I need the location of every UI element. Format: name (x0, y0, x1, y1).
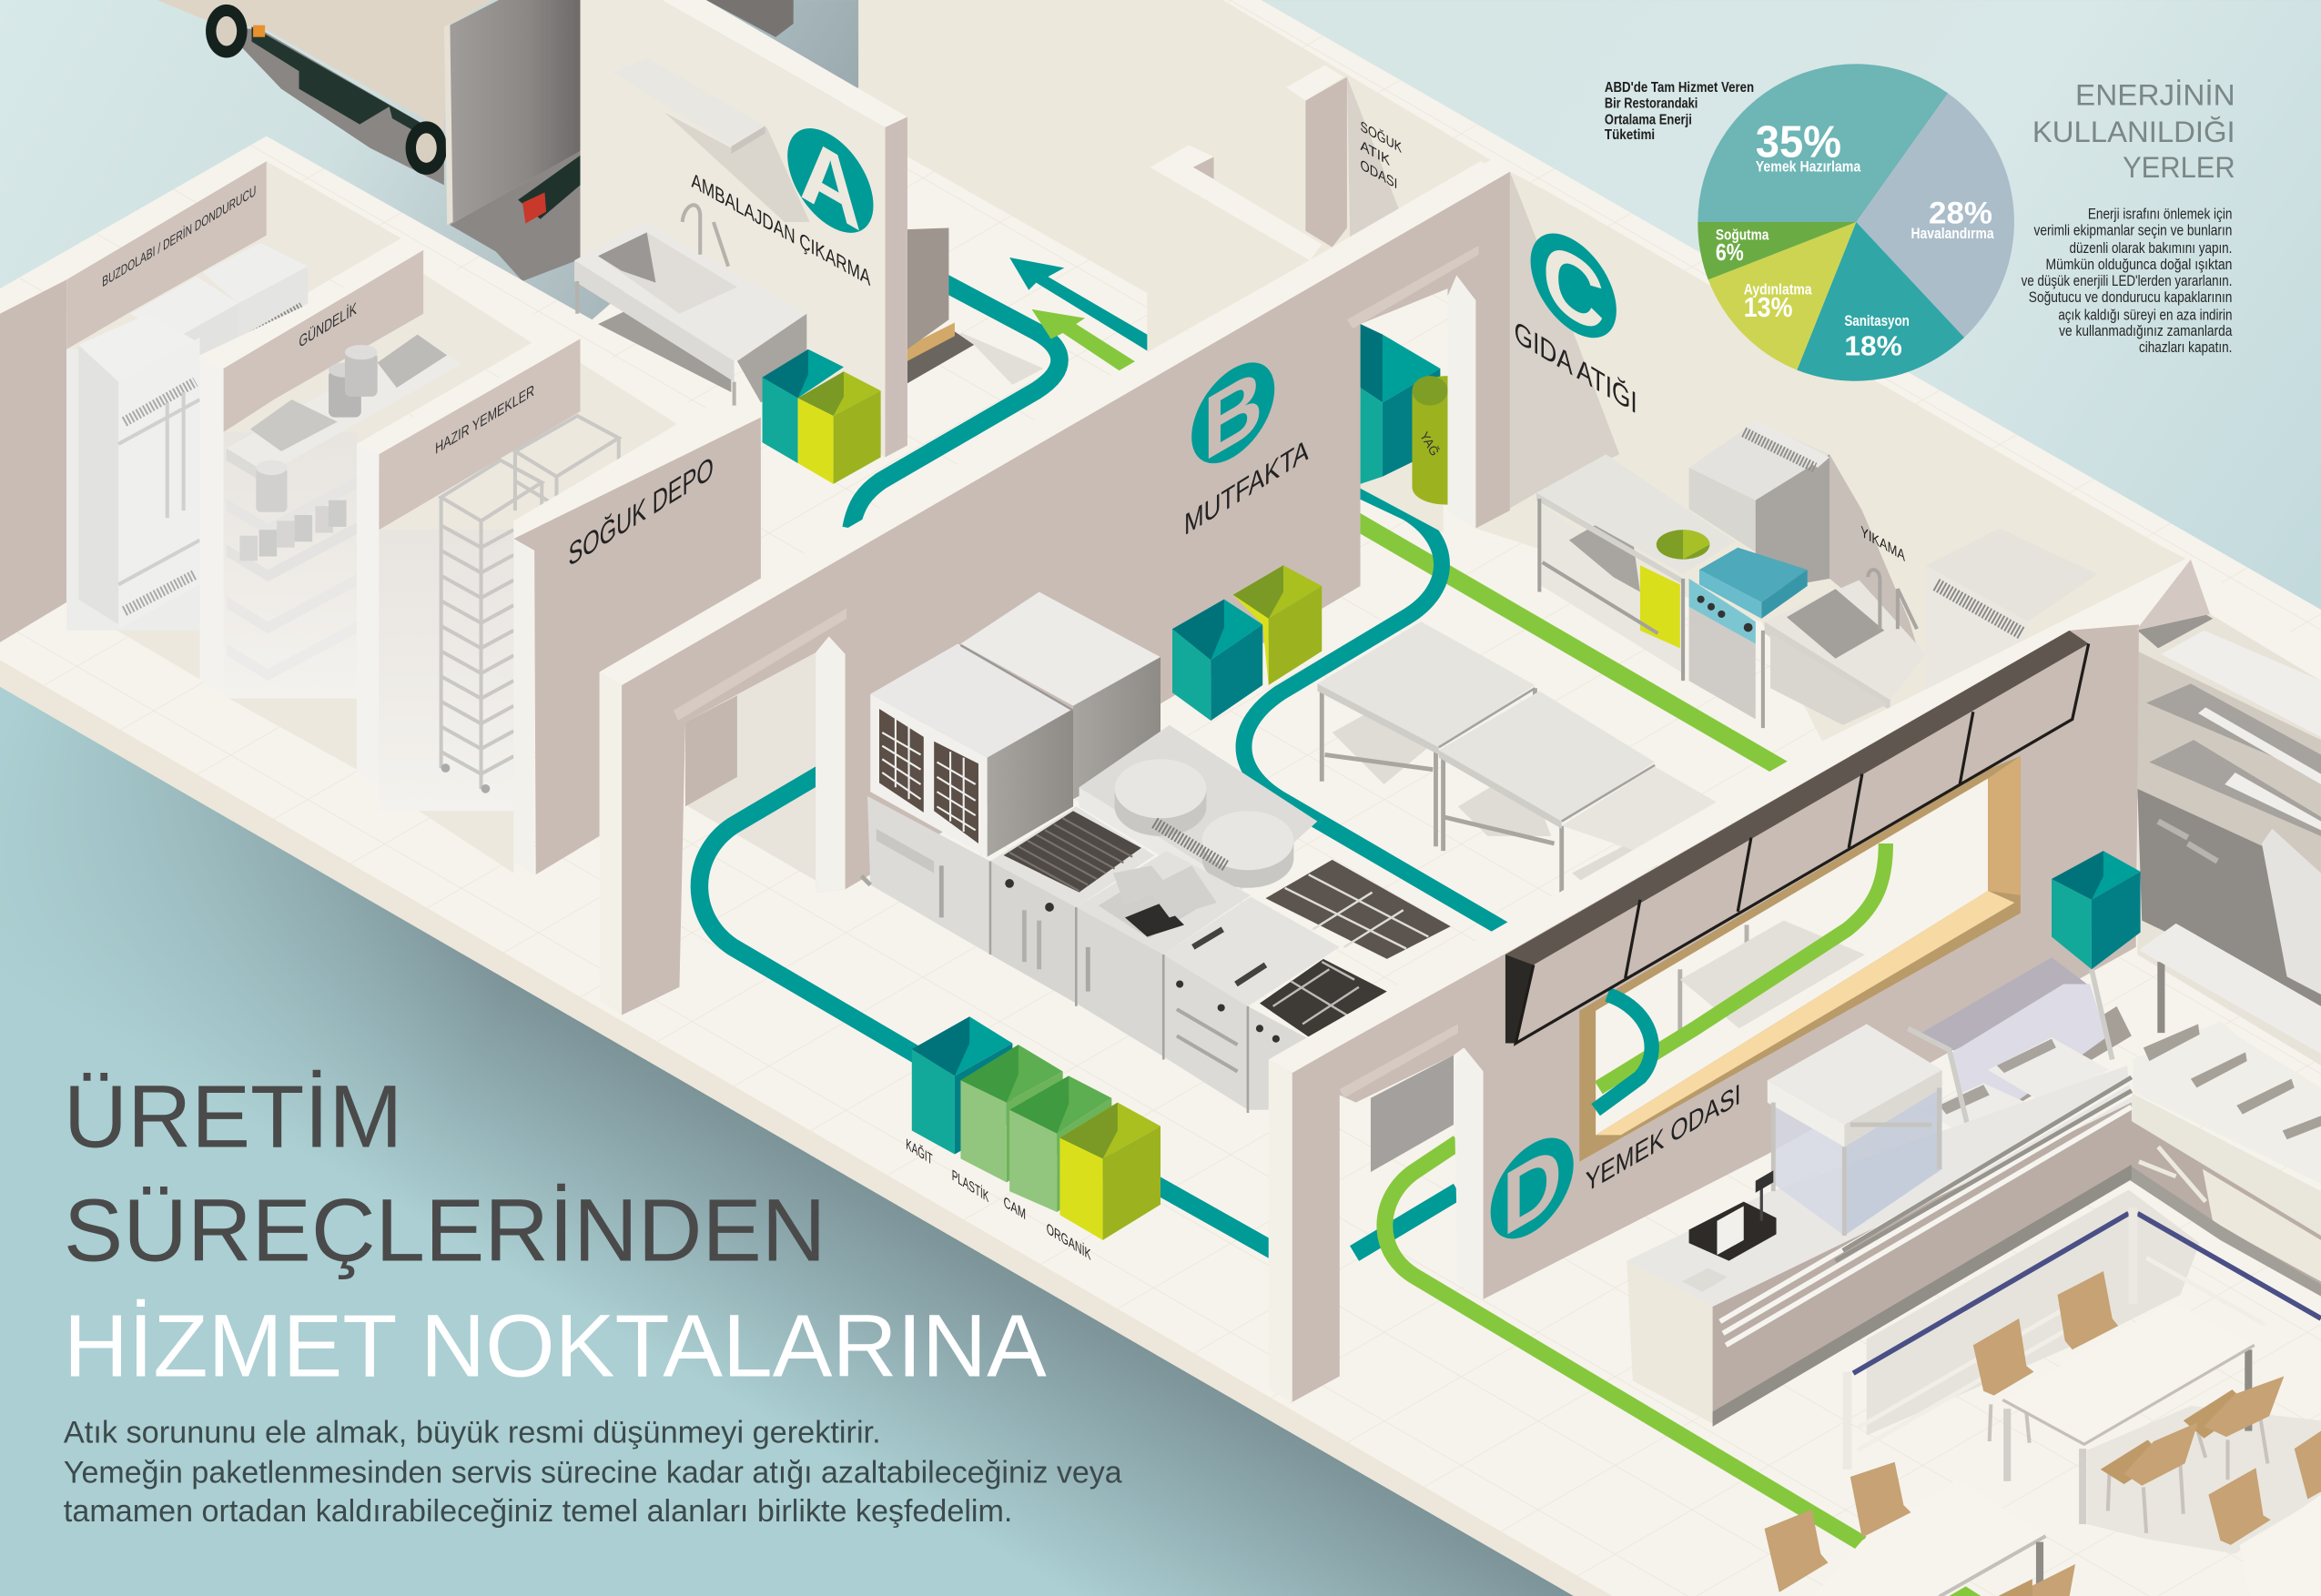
pie labels: Yemek Hazırlama (1756, 159, 1861, 176)
intro text: tamamen ortadan kaldırabileceğiniz temel alanları birlikte keşfedelim. (64, 1494, 1012, 1529)
fridge (78, 314, 200, 629)
intro text (64, 1416, 1122, 1529)
energy heading: YERLER (2123, 151, 2235, 184)
floor shadow right (2087, 1406, 2321, 1554)
trolleys (441, 416, 619, 793)
panel: wall C (1475, 172, 2188, 742)
label: cold waste room: ATIK (1361, 136, 1390, 169)
bin labels: PLASTİK (952, 1167, 988, 1206)
energy tips text: Enerji israfını önlemek için (2088, 207, 2232, 223)
table 3 (2240, 1498, 2321, 1596)
pie labels: Sanitasyon (1844, 313, 1910, 329)
label: washing: YIKAMA (1860, 522, 1905, 565)
panel: cold storage (0, 161, 761, 874)
panel: wall B (600, 161, 1510, 1015)
arrow: green (1032, 309, 1137, 371)
pie labels: Havalandırma (1911, 226, 1994, 242)
label: food waste: GIDA ATIĞI (1515, 315, 1637, 420)
door C and bins (1361, 324, 1447, 532)
energy tips text: ve kullanmadığınız zamanlarda (2059, 323, 2233, 339)
intro text: Yemeğin paketlenmesinden servis sürecine kadar atığı azaltabileceğiniz veya (64, 1456, 1122, 1490)
cooking line (861, 592, 1451, 1113)
bins: recycling (912, 1016, 1160, 1240)
equipment: room C (1536, 420, 2097, 728)
serving window (1579, 756, 2021, 1162)
main title: ÜRETİM (64, 1066, 402, 1166)
hood (1505, 631, 2089, 1044)
energy tips text: ve düşük enerjili LED'lerden yararlanın. (2022, 273, 2232, 289)
arrow: teal (1009, 258, 1147, 350)
energy tips text: cihazları kapatın. (2139, 339, 2232, 356)
storage labels: GÜNDELİK (299, 298, 357, 352)
energy tips text: açık kaldığı süreyi en aza indirin (2058, 307, 2232, 323)
display case (1768, 1024, 1942, 1236)
shelves (227, 335, 461, 681)
storage labels: SOĞUK DEPO (568, 449, 714, 573)
energy tips text (2022, 207, 2233, 356)
oven rack windows (879, 709, 978, 843)
pie labels: 28% (1929, 197, 1992, 231)
prep tables (1317, 621, 1732, 905)
pie title: ABD'de Tam Hizmet Veren (1605, 80, 1754, 96)
dining tables and chairs (1765, 1271, 2321, 1596)
label: cold waste room (1361, 117, 1402, 193)
rope barrier (1848, 1207, 2321, 1470)
pie labels (1716, 117, 1994, 361)
bins at A (763, 349, 881, 484)
chair right 3 (2208, 1468, 2271, 1545)
badge A (787, 106, 874, 258)
badge C (1531, 212, 1617, 364)
chair front 2 (1765, 1510, 1828, 1592)
badge A: A (799, 114, 861, 252)
main title: SÜREÇLERİNDEN (64, 1181, 826, 1280)
serving counter (1627, 1066, 2132, 1427)
bin right (2052, 851, 2141, 969)
chair front 4 (1997, 1579, 2032, 1596)
door B inner view (685, 652, 816, 881)
intro text: Atık sorununu ele almak, büyük resmi düşünmeyi gerektirir. (64, 1416, 881, 1450)
pie labels: 35% (1756, 117, 1841, 167)
chair back row (1973, 1271, 2118, 1443)
table 2 (1813, 1480, 2046, 1596)
label: unpacking: AMBALAJDAN ÇIKARMA (691, 168, 871, 291)
bin labels: ORGANİK (1047, 1219, 1091, 1264)
energy tips text: Soğutucu ve dondurucu kapaklarının (2029, 289, 2232, 306)
door D (1340, 1024, 1484, 1299)
floor path: green dining (1384, 1143, 1862, 1543)
label: oil: YAĞ (1417, 429, 1442, 459)
badge B: B (1203, 348, 1263, 481)
storage labels: HAZIR YEMEKLER (435, 380, 534, 458)
badge D: D (1502, 1123, 1562, 1257)
pie title: Bir Restorandaki (1605, 96, 1698, 112)
table 1 (2002, 1302, 2255, 1524)
chair front 3 (2026, 1564, 2075, 1596)
energy tips text: verimli ekipmanlar seçin ve bunların (2034, 223, 2232, 239)
bins at B (1172, 565, 1322, 721)
energy tips text: Mümkün olduğunca doğal ışıktan (2046, 257, 2232, 273)
boxes on pallet (907, 227, 1044, 385)
energy heading (2032, 78, 2235, 184)
badge D (1491, 1116, 1574, 1263)
label: dining room: YEMEK ODASI (1586, 1078, 1740, 1199)
pie labels: 18% (1844, 329, 1902, 361)
pie title: Tüketimi (1605, 127, 1655, 143)
kitchen shelves right (2137, 570, 2321, 1066)
energy heading: KULLANILDIĞI (2032, 115, 2235, 148)
chair front 1 (1850, 1462, 1911, 1538)
floor path: teal door to bins (699, 773, 1458, 1253)
pie title: Ortalama Enerji (1605, 113, 1692, 128)
badge C: C (1543, 218, 1605, 357)
back rooms (858, 0, 1491, 352)
serving counter right arm (2129, 1021, 2321, 1297)
label: cold waste room: SOĞUK (1361, 117, 1402, 157)
sneeze guard (1908, 957, 2132, 1143)
chair right 1 (2184, 1376, 2284, 1480)
panel: wall A (574, 0, 907, 484)
truck (157, 0, 794, 281)
label: kitchen: MUTFAKTA (1184, 432, 1309, 542)
floor path: teal kitchen (1243, 489, 1504, 929)
pie labels: 13% (1744, 291, 1792, 323)
pie labels: 6% (1716, 238, 1744, 266)
label: cold waste room: ODASI (1361, 156, 1397, 193)
chair far right (2295, 1431, 2321, 1499)
main title (64, 1066, 1047, 1395)
storage labels: BUZDOLABI / DERİN DONDURUCU (102, 182, 256, 290)
bin labels: KAĞIT (906, 1134, 933, 1168)
floor path: teal unpacking (851, 281, 1059, 529)
main title: HİZMET NOKTALARINA (64, 1296, 1047, 1395)
panel: wall D (1269, 558, 2321, 1403)
energy heading: ENERJİNİN (2075, 78, 2235, 111)
bin labels: CAM (1004, 1193, 1026, 1223)
storage labels (102, 182, 714, 573)
pie labels: Aydınlatma (1744, 282, 1812, 298)
floor path: green C room (1356, 520, 1784, 770)
chair right 2 (2101, 1422, 2198, 1533)
energy tips text: düzenli olarak bakımını yapın. (2070, 240, 2232, 257)
pie chart (1698, 64, 2014, 381)
pie labels: Soğutma (1716, 227, 1769, 243)
badge B (1191, 341, 1274, 488)
floor shadow behind rope (1867, 1190, 2200, 1436)
bin labels (906, 1134, 1091, 1264)
pie title (1605, 80, 1754, 143)
cash register (1681, 1170, 1777, 1292)
